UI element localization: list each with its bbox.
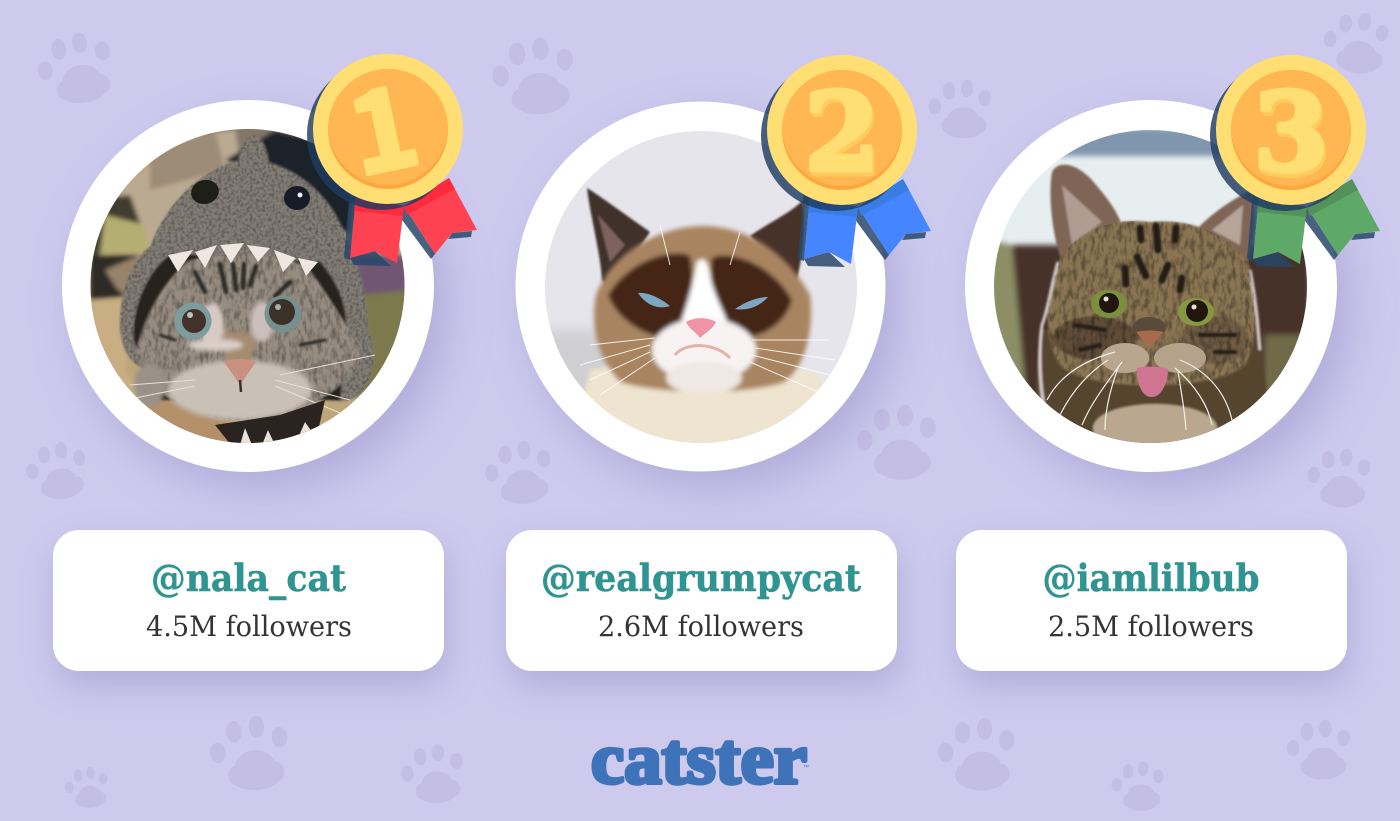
card: iamlilbub <box>956 530 1350 686</box>
nose <box>1132 317 1166 339</box>
ribbons <box>404 178 477 254</box>
nose <box>224 359 256 382</box>
eyes <box>174 302 212 340</box>
ears <box>1050 165 1124 262</box>
number 2: 2 <box>806 74 882 200</box>
hat <box>120 135 374 401</box>
frown <box>675 346 730 358</box>
hood interior <box>134 254 346 400</box>
forehead stripes <box>1075 226 1235 352</box>
fur edge <box>1040 262 1058 410</box>
card: realgrumpycat <box>506 530 900 686</box>
card: nala_cat <box>53 530 447 686</box>
eyes <box>638 293 670 307</box>
number 3: 3 <box>1253 70 1329 196</box>
followers: 4.5M followers <box>146 610 352 643</box>
logo: catster: catster <box>591 719 807 799</box>
number 3: 3 <box>1255 74 1331 200</box>
medal 1 <box>307 36 477 266</box>
mask <box>608 253 692 338</box>
panel: realgrumpycat portrait <box>516 102 899 489</box>
ribbons <box>858 179 931 255</box>
logo: catster: ™ <box>803 764 809 771</box>
handle: @realgrumpycat <box>541 556 861 600</box>
whiskers <box>1047 352 1232 430</box>
face <box>136 254 362 420</box>
eyes <box>1091 290 1127 318</box>
head <box>594 226 811 392</box>
photo: grumpy cat <box>540 128 862 450</box>
head <box>1048 221 1255 385</box>
body <box>1034 320 1267 433</box>
teeth <box>168 243 318 276</box>
chest <box>584 366 824 443</box>
tongue <box>1137 367 1168 397</box>
number 1: 1 <box>332 36 431 208</box>
button eyes <box>191 180 219 204</box>
medal 2 <box>761 55 931 267</box>
photo: lil bub <box>990 128 1310 452</box>
panel: iamlilbub portrait <box>965 100 1351 490</box>
panel: nala_cat portrait <box>62 100 448 490</box>
whiskers <box>580 225 835 395</box>
medal 3 <box>1210 55 1380 267</box>
muzzle <box>652 318 756 382</box>
muzzle <box>1101 343 1149 373</box>
followers: 2.5M followers <box>1048 610 1254 643</box>
blaze <box>680 259 728 325</box>
handle: @iamlilbub <box>1042 556 1260 600</box>
whiskers <box>130 355 375 415</box>
ears <box>587 188 650 290</box>
handle: @nala_cat <box>151 556 346 600</box>
ribbons <box>1307 179 1380 255</box>
nose <box>686 318 716 338</box>
collar <box>215 400 325 443</box>
photo: cat in shark hat <box>90 125 410 450</box>
number 2: 2 <box>804 70 880 196</box>
followers: 2.6M followers <box>598 610 804 643</box>
